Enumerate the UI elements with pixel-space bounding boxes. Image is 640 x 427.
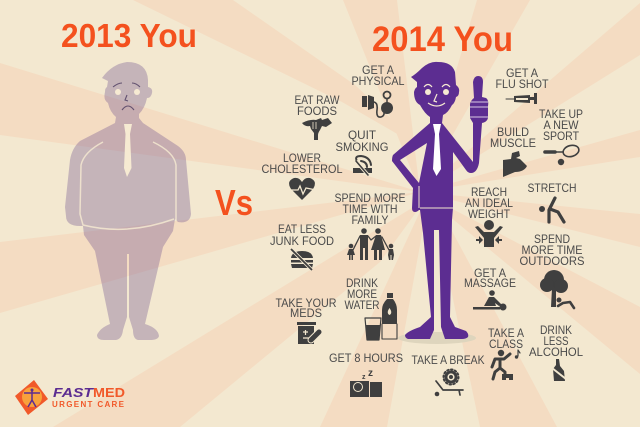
icon: blood pressure cuff <box>362 92 393 117</box>
tip: lower cholesterol: LOWER <box>283 151 321 165</box>
icon: fork with vegetable <box>302 118 332 140</box>
thumb fingers <box>470 102 488 117</box>
tip: spend more time outdoors: MORE TIME <box>522 243 582 257</box>
icon: tree with person <box>540 270 574 308</box>
logo: FastMed Urgent Care <box>15 380 125 415</box>
tip: take a class <box>488 326 524 380</box>
tip: drink less alcohol: LESS <box>544 334 568 348</box>
tip: eat less junk food: EAT LESS <box>278 222 326 236</box>
tip: get a physical: PHYSICAL <box>352 74 405 88</box>
tip: get a flu shot <box>496 66 549 104</box>
figure: sad overweight 2013 self <box>65 62 191 340</box>
tip: spend more time outdoors: OUTDOORS <box>520 254 584 268</box>
icon: crossed bottle <box>552 359 566 381</box>
icon: syringe <box>506 93 537 104</box>
tip: get a massage: GET A <box>474 266 506 280</box>
tip: take up a new sport: A NEW <box>544 118 579 132</box>
title: 2014 You: 2014 You <box>372 20 513 59</box>
tip: reach an ideal weight: WEIGHT <box>468 207 511 221</box>
tip: eat raw foods: EAT RAW <box>294 93 340 107</box>
tip: take your meds: TAKE YOUR <box>276 296 337 310</box>
tip: take up a new sport: SPORT <box>543 129 580 143</box>
tip: get a flu shot: FLU SHOT <box>496 77 549 91</box>
icon: crossed burger <box>291 249 313 270</box>
icon: massage <box>473 290 506 310</box>
tip: build muscle: MUSCLE <box>490 136 536 150</box>
tip: get a physical: GET A <box>362 63 394 77</box>
logo: FastMed Urgent Care: FAST <box>53 385 94 400</box>
tip: drink more water: WATER <box>344 298 380 312</box>
tip: stretch: STRETCH <box>528 181 576 195</box>
tip: eat raw foods <box>294 93 340 140</box>
versus label: Vs <box>215 182 253 223</box>
icon: sleeping in bed <box>350 368 382 397</box>
tip: take a class: TAKE A <box>488 326 524 340</box>
tip: take a break <box>412 353 484 396</box>
tip: build muscle <box>490 125 536 177</box>
icon: family <box>347 228 394 260</box>
sad face <box>113 83 140 110</box>
icon: heart with pulse <box>288 178 316 200</box>
tip: take a break: TAKE A BREAK <box>412 353 484 367</box>
tip: quit smoking <box>336 128 388 175</box>
tip: get a physical <box>352 63 405 117</box>
tip: reach an ideal weight: REACH <box>471 185 507 199</box>
smiling face <box>424 84 450 106</box>
tip: get a massage: MASSAGE <box>464 276 516 290</box>
icon: no cigarette <box>353 156 372 175</box>
logo mark <box>15 380 48 415</box>
tip: eat raw foods: FOODS <box>297 104 337 118</box>
tip: take up a new sport: TAKE UP <box>539 107 583 121</box>
icon: flexed arm <box>503 151 527 177</box>
icon: sun and lounger <box>435 370 463 396</box>
icon: slim figure with arrows <box>475 220 503 247</box>
tip: reach an ideal weight: AN IDEAL <box>465 196 513 210</box>
icon: glass and bottle <box>365 293 397 340</box>
tip: spend more time outdoors: SPEND <box>534 232 570 246</box>
icon: sleeping in bed: z <box>368 368 373 379</box>
icon: stretching person <box>539 198 564 222</box>
shadow under 2014 figure <box>398 332 476 344</box>
tip: quit smoking: QUIT <box>348 128 377 142</box>
tip: spend more time with family: TIME WITH <box>342 202 398 216</box>
tip: drink less alcohol: DRINK <box>540 323 572 337</box>
tip: stretch <box>528 181 576 222</box>
icon: step class with music note <box>492 350 520 380</box>
tip: spend more time with family <box>334 191 406 260</box>
tip: build muscle: BUILD <box>497 125 529 139</box>
icon: pill bottle <box>297 322 319 344</box>
tip: get 8 hours <box>329 351 403 397</box>
logo: FastMed Urgent Care: URGENT CARE <box>52 400 125 409</box>
figure: slim confident 2014 self <box>392 62 488 339</box>
tip: get 8 hours: GET 8 HOURS <box>329 351 403 365</box>
tip: quit smoking: SMOKING <box>336 140 388 154</box>
tie <box>124 124 132 177</box>
tip: take up a new sport <box>539 107 583 165</box>
title: 2013 You: 2013 You <box>61 17 197 54</box>
tip: get a flu shot: GET A <box>506 66 538 80</box>
tip: eat less junk food <box>270 222 334 270</box>
tip: drink more water <box>344 276 397 340</box>
tip: reach an ideal weight <box>465 185 513 247</box>
white tie <box>433 124 441 176</box>
tip: take a class: CLASS <box>489 337 523 351</box>
tip: drink more water: DRINK <box>346 276 378 290</box>
tip: spend more time with family: FAMILY <box>352 213 388 227</box>
tip: spend more time with family: SPEND MORE <box>334 191 406 205</box>
tip: spend more time outdoors <box>520 232 584 308</box>
tip: get a massage <box>464 266 516 310</box>
tip: take your meds: MEDS <box>290 306 322 320</box>
tip: drink less alcohol: ALCOHOL <box>529 345 583 359</box>
belt line <box>419 186 453 208</box>
icon: racket and ball <box>545 144 580 165</box>
tip: drink more water: MORE <box>347 287 377 301</box>
logo: FastMed Urgent Care: MED <box>93 385 125 400</box>
tip: lower cholesterol: CHOLESTEROL <box>262 162 343 176</box>
tip: eat less junk food: JUNK FOOD <box>270 234 334 248</box>
tip: take your meds <box>276 296 337 344</box>
icon: sleeping in bed: z <box>362 374 366 381</box>
tip: drink less alcohol <box>529 323 583 381</box>
tip: lower cholesterol <box>262 151 343 200</box>
